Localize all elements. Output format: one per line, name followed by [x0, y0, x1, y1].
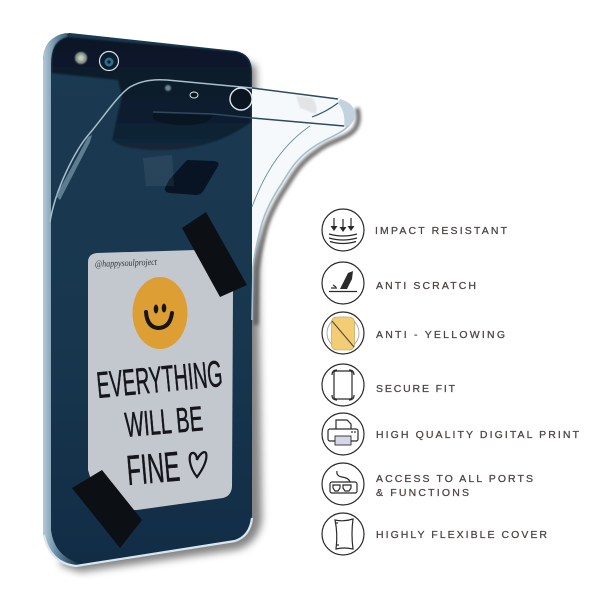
flap diagonal line — [312, 103, 338, 117]
icon: scratch — [322, 262, 364, 304]
handle text: @happysoulproject — [95, 258, 157, 270]
flap shadow — [256, 108, 358, 325]
lower slot on case — [153, 113, 213, 125]
sticker card — [88, 250, 233, 510]
feature: impact resistant — [322, 209, 508, 251]
rim corner — [338, 99, 355, 127]
icon: ports — [322, 463, 364, 505]
icon: impact — [322, 209, 364, 251]
label: ACCESS TO ALL PORTS — [376, 473, 533, 485]
icon: secure fit — [322, 364, 364, 406]
icon: yellowing — [322, 312, 364, 354]
rim top line — [252, 88, 338, 99]
label: HIGHLY FLEXIBLE COVER — [376, 529, 547, 541]
label: ANTI - YELLOWING — [376, 329, 505, 341]
case rim outline — [50, 80, 252, 222]
flap grey reflection — [296, 96, 316, 114]
faint square reflection — [143, 155, 174, 186]
case small dot — [165, 85, 171, 91]
phone shadow — [60, 60, 262, 572]
flash — [75, 52, 87, 64]
feature: anti yellowing — [322, 312, 505, 354]
tape bottom — [72, 470, 142, 548]
feature: digital print — [322, 413, 580, 455]
slogan line 2: WILL BE — [123, 399, 204, 445]
label line 2: & FUNCTIONS — [376, 487, 469, 499]
slogan line 1: EVERYTHING — [95, 353, 224, 406]
tape top — [182, 212, 247, 297]
feature list — [322, 209, 580, 555]
camera lens — [100, 52, 118, 70]
label: ANTI SCRATCH — [376, 280, 476, 292]
label: SECURE FIT — [376, 383, 456, 395]
slogan line 3: FINE — [125, 443, 182, 494]
rim bottom line — [153, 112, 344, 126]
label: HIGH QUALITY DIGITAL PRINT — [376, 429, 580, 441]
side button groove — [56, 135, 92, 200]
metal edge band — [43, 33, 78, 566]
feature: ports — [322, 463, 533, 505]
feature: secure fit — [322, 364, 456, 406]
feature: flexible cover — [322, 513, 547, 555]
flap outer edge — [252, 118, 354, 320]
phone body — [43, 33, 252, 566]
phone with clear case — [43, 33, 358, 572]
sticker artwork — [72, 212, 247, 548]
label: IMPACT RESISTANT — [375, 225, 508, 237]
case small hole — [190, 92, 198, 98]
heart — [190, 452, 206, 477]
case lens hole — [230, 88, 252, 110]
icon: printer — [322, 413, 364, 455]
clear case flap — [252, 88, 354, 320]
bottom case edge — [44, 518, 252, 566]
icon: flexible — [322, 513, 364, 555]
fingerprint cutout — [165, 160, 218, 195]
feature: anti scratch — [322, 262, 476, 304]
flap inner line — [252, 126, 310, 207]
dark glass top — [52, 37, 251, 150]
smiley face — [132, 277, 188, 349]
